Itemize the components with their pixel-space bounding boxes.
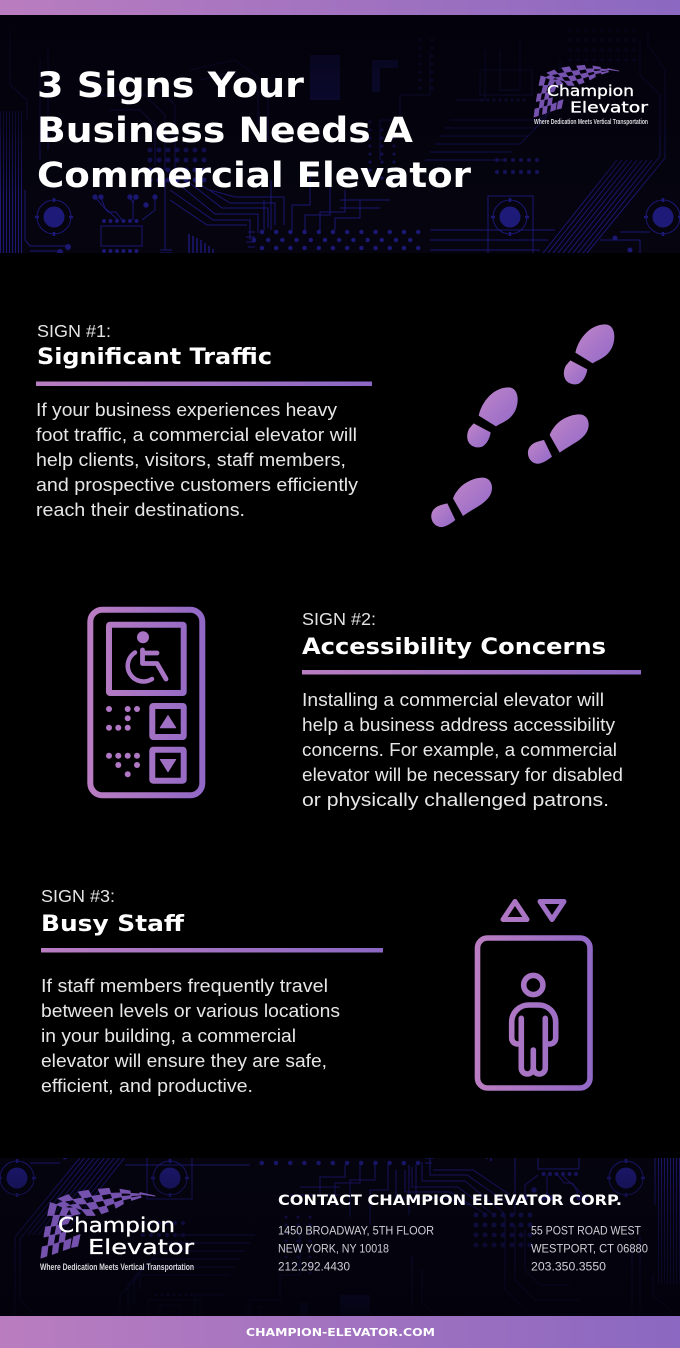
sign 2 body text: help a business address accessibility <box>302 715 615 735</box>
address: New York: 212.292.4430 <box>278 1262 350 1274</box>
sign 2 rule <box>302 670 641 674</box>
footprint 3 <box>528 414 589 464</box>
sign 3 body text: between levels or various locations <box>41 1001 340 1021</box>
sign 3 heading: Busy Staff <box>41 912 185 937</box>
header panel: circuit background <box>0 15 680 254</box>
sign 1 label: SIGN #1: <box>37 321 111 341</box>
sign 1 body text <box>36 400 358 520</box>
wheelchair symbol <box>128 631 166 681</box>
person <box>512 975 556 1074</box>
address: New York: NEW YORK, NY 10018 <box>278 1244 389 1256</box>
title: Commercial Elevator <box>37 156 472 196</box>
logo: header: Elevator <box>570 98 649 116</box>
footprint 2 <box>467 387 518 447</box>
logo: footer: Champion <box>58 1213 175 1237</box>
website url: CHAMPION-ELEVATOR.COM <box>246 1326 435 1339</box>
panel: sign 2 accessibility concerns <box>302 609 641 810</box>
address: Westport: WESTPORT, CT 06880 <box>531 1244 648 1256</box>
sign 3 body text: in your building, a commercial <box>41 1026 296 1046</box>
sign 2 heading: Accessibility Concerns <box>302 635 606 660</box>
down arrow <box>540 902 564 920</box>
sign 3 body text <box>41 976 340 1096</box>
up button <box>152 706 184 737</box>
address: New York: 1450 BROADWAY, 5TH FLOOR <box>278 1226 434 1238</box>
sign 3 label: SIGN #3: <box>41 886 115 906</box>
sign 2 body text <box>302 690 623 810</box>
sign 1 body text: help clients, visitors, staff members, <box>36 450 346 470</box>
top gradient bar <box>0 0 680 15</box>
elevator frame <box>478 938 590 1088</box>
footprint 1 <box>564 324 614 384</box>
sign 2 body text: or physically challenged patrons. <box>302 790 609 810</box>
sign 1 body text: and prospective customers efficiently <box>36 475 358 495</box>
sign 2 label: SIGN #2: <box>302 609 376 629</box>
address: New York <box>278 1226 434 1274</box>
sign 3 body text: efficient, and productive. <box>41 1076 253 1096</box>
logo: footer <box>40 1188 195 1273</box>
footprint 4 <box>431 478 492 527</box>
address: Westport: 55 POST ROAD WEST <box>531 1226 641 1238</box>
sign 2 body text: Installing a commercial elevator will <box>302 690 604 710</box>
bottom gradient bar <box>0 1316 680 1348</box>
logo: footer: Where Dedication Meets Vertical Transportation <box>40 1262 194 1273</box>
sign 3 rule <box>41 948 383 952</box>
icon: elevator car with person <box>478 902 590 1088</box>
sign 1 body text: If your business experiences heavy <box>36 400 337 420</box>
logo: footer: Elevator <box>88 1235 195 1259</box>
logo: header <box>534 65 649 126</box>
title: Business Needs A <box>37 111 413 151</box>
footer panel: circuit background <box>0 1158 680 1316</box>
sign 3 body text: elevator will ensure they are safe, <box>41 1051 327 1071</box>
panel: sign 1 significant traffic <box>36 321 372 520</box>
up arrow <box>503 902 527 920</box>
sign 1 heading: Significant Traffic <box>37 345 272 370</box>
icon: elevator control panel with wheelchair symbol <box>90 610 202 795</box>
title <box>37 66 472 196</box>
contact heading: CONTACT CHAMPION ELEVATOR CORP. <box>278 1193 622 1209</box>
panel: sign 3 busy staff <box>41 886 383 1096</box>
sign 2 body text: elevator will be necessary for disabled <box>302 765 623 785</box>
title: 3 Signs Your <box>37 66 305 106</box>
sign 1 body text: foot traffic, a commercial elevator will <box>36 425 357 445</box>
sign 2 body text: concerns. For example, a commercial <box>302 740 617 760</box>
sign 3 body text: If staff members frequently travel <box>41 976 328 996</box>
braille dots <box>106 706 140 777</box>
down button <box>152 750 184 781</box>
sign 1 body text: reach their destinations. <box>36 500 245 520</box>
address: Westport <box>531 1226 648 1274</box>
logo: header: Champion <box>547 82 634 100</box>
icon: footprints <box>431 324 614 527</box>
sign 1 rule <box>36 382 372 386</box>
address: Westport: 203.350.3550 <box>531 1262 606 1274</box>
